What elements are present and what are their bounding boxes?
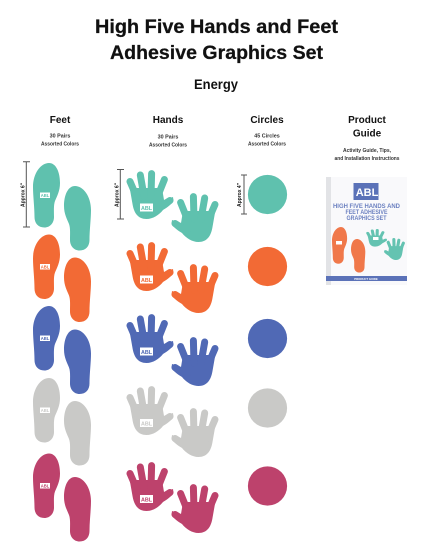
heading: product guide: Product (348, 115, 387, 126)
panel: feet column (20, 115, 91, 542)
dimension: approx 6 inch feet (20, 162, 30, 227)
panel: product guide column (326, 115, 407, 285)
booklet hands illustration (367, 230, 404, 260)
blue hands: ABL (141, 350, 153, 356)
booklet feet illustration (332, 227, 365, 273)
orange feet: ABL (41, 264, 50, 270)
dimension: approx 6 inch hands: Approx 6" (114, 182, 120, 207)
title: High Five Hands and Feet (95, 16, 339, 38)
panel: circles column (237, 115, 287, 506)
text: circles quantity: 45 Circles (254, 134, 280, 140)
text: product guide description: Activity Guide, Tips, (343, 148, 391, 154)
teal hands (129, 174, 216, 242)
blue circle (248, 319, 287, 358)
heading: circles: Circles (250, 115, 284, 126)
dimension: approx 4 inch circle (237, 175, 247, 214)
booklet title (333, 203, 400, 222)
title: Adhesive Graphics Set (110, 42, 324, 64)
teal circle (248, 175, 287, 214)
magenta hands (129, 466, 216, 533)
booklet title: HIGH FIVE HANDS AND (333, 203, 400, 210)
booklet title: FEET ADHESIVE (346, 209, 388, 216)
panel: hands column (114, 115, 216, 533)
dimension: approx 6 inch feet: Approx 6" (20, 182, 26, 207)
text: product guide description: and Installation Instructions (334, 156, 400, 162)
text: hands quantity: 30 Pairs (158, 134, 178, 140)
orange feet (33, 234, 91, 322)
blue feet: ABL (41, 336, 50, 341)
teal feet: ABL (41, 193, 50, 198)
orange hands: ABL (141, 278, 153, 284)
product guide booklet (326, 177, 407, 285)
blue feet (33, 306, 91, 394)
text: feet quantity: Assorted Colors (41, 142, 79, 148)
heading: product guide: Guide (353, 128, 382, 140)
text: circles quantity (248, 134, 286, 148)
dimension: approx 4 inch circle: Approx 4" (237, 182, 243, 207)
magenta circle (248, 466, 287, 506)
text: hands quantity (149, 134, 187, 148)
teal hands: ABL (141, 206, 153, 212)
text: hands quantity: Assorted Colors (149, 142, 187, 148)
gray circle (248, 388, 287, 428)
orange hands (129, 246, 216, 313)
orange circle (248, 247, 287, 286)
text: product guide description (334, 148, 400, 162)
heading: feet: Feet (50, 115, 71, 126)
booklet logo: ABL (356, 187, 379, 199)
heading: hands: Hands (153, 115, 184, 126)
magenta feet (33, 454, 91, 542)
booklet cover (326, 177, 407, 285)
text: feet quantity (41, 134, 79, 148)
magenta feet: ABL (41, 484, 50, 488)
subtitle: Energy (194, 76, 238, 92)
gray feet: ABL (41, 408, 50, 413)
gray hands (129, 390, 216, 457)
title (95, 16, 339, 64)
gray hands: ABL (141, 422, 153, 428)
blue hands (129, 318, 216, 386)
dimension: approx 6 inch hands (114, 170, 124, 219)
text: feet quantity: 30 Pairs (50, 134, 70, 140)
teal feet (33, 163, 91, 250)
heading: product guide (348, 115, 387, 140)
magenta hands: ABL (141, 498, 153, 504)
gray feet (33, 378, 91, 466)
booklet footer bar: PRODUCT GUIDE (354, 277, 378, 281)
text: circles quantity: Assorted Colors (248, 142, 286, 148)
booklet title: GRAPHICS SET (346, 215, 387, 222)
